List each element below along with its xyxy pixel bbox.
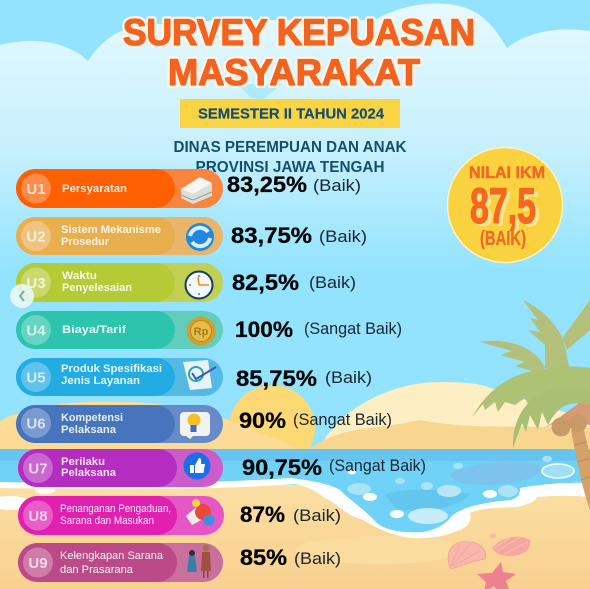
row U5: Produk Spesifikasi Jenis Layanan: Jenis Layanan: [61, 375, 140, 387]
row U3: Waktu Penyelesaian: [16, 263, 356, 302]
row U9: Kelengkapan Sarana: (Baik): [294, 550, 341, 568]
row U2: Sistem Mekanisme Prosedur: Sistem Mekanisme: [61, 224, 161, 236]
row U9: Kelengkapan Sarana: dan Prasarana: [60, 564, 134, 576]
background: sand patch lower: [295, 536, 465, 564]
row U1: Persyaratan: [16, 169, 361, 208]
icon: thumbs up: [184, 452, 210, 480]
title: MASYARAKAT: [168, 52, 420, 93]
row U6: Kompetensi Pelaksana: 90%: [239, 408, 286, 433]
background: front dune: [310, 420, 590, 449]
organisation name: [174, 139, 407, 176]
row U5: Produk Spesifikasi Jenis Layanan: 85,75%: [236, 366, 317, 391]
row U6: Kompetensi Pelaksana: [16, 405, 392, 443]
icon: paper stack: [181, 177, 212, 204]
callout: nilai IKM: (BAIK): [480, 228, 526, 250]
organisation name: PROVINSI JAWA TENGAH: [196, 159, 384, 176]
row U1: Persyaratan: Persyaratan: [62, 183, 127, 195]
background: sky gap behind title: [238, 84, 282, 100]
title: SURVEY KEPUASAN: [123, 12, 475, 53]
row U5: Produk Spesifikasi Jenis Layanan: (Baik): [325, 369, 372, 387]
row U7: Perilaku Pelaksana: [18, 449, 426, 487]
background: clouds: [0, 3, 590, 270]
callout: nilai IKM: 87,5: [470, 178, 536, 234]
icon: small shell: [490, 534, 496, 538]
row U4: Biaya/Tarif: Biaya/Tarif: [62, 324, 126, 336]
row U6: Kompetensi Pelaksana: Kompetensi: [61, 412, 123, 424]
row U4: Biaya/Tarif: (Sangat Baik): [304, 320, 402, 338]
background: beach: [0, 485, 590, 589]
row U8: Penanganan Pengaduan: Penanganan Pengaduan,: [60, 503, 171, 515]
row U2: Sistem Mekanisme Prosedur: (Baik): [319, 228, 367, 246]
icon: clock: [186, 272, 212, 298]
icon: seashell left: [448, 542, 486, 569]
row U8: Penanganan Pengaduan: [18, 496, 341, 535]
organisation name: DINAS PEREMPUAN DAN ANAK: [174, 139, 407, 156]
row U1: Persyaratan: U1: [26, 181, 46, 198]
row U3: Waktu Penyelesaian: Penyelesaian: [62, 282, 132, 294]
icon: idea bulb: [180, 412, 210, 439]
icon: rupiah coin: [186, 316, 216, 346]
row U3: Waktu Penyelesaian: U3: [26, 275, 46, 292]
row U2: Sistem Mekanisme Prosedur: Prosedur: [61, 236, 110, 248]
background: back dunes: [320, 382, 590, 449]
carousel previous button: [10, 284, 34, 308]
title: MASYARAKAT: [168, 52, 420, 93]
row U2: Sistem Mekanisme Prosedur: 83,75%: [231, 223, 312, 248]
row U3: Waktu Penyelesaian: Waktu: [62, 270, 97, 282]
row U7: Perilaku Pelaksana: Perilaku: [61, 456, 105, 468]
row U5: Produk Spesifikasi Jenis Layanan: U5: [26, 370, 46, 386]
row U9: Kelengkapan Sarana: 85%: [240, 545, 287, 570]
title: [123, 12, 475, 93]
background: sun: [229, 385, 315, 471]
row U2: Sistem Mekanisme Prosedur: U2: [26, 228, 46, 246]
callout: nilai IKM: 87,5: [474, 181, 540, 237]
icon: megaphone: [186, 499, 214, 526]
row U3: Waktu Penyelesaian: 82,5%: [232, 270, 299, 295]
row U4: Biaya/Tarif: 100%: [235, 317, 293, 342]
row U7: Perilaku Pelaksana: U7: [28, 460, 48, 478]
row U8: Penanganan Pengaduan: U8: [28, 508, 48, 525]
row U8: Penanganan Pengaduan: (Baik): [293, 507, 341, 525]
row U5: Produk Spesifikasi Jenis Layanan: Produk Spesifikasi: [61, 363, 162, 375]
row U1: Persyaratan: 83,25%: [227, 172, 307, 197]
row U4: Biaya/Tarif: U4: [26, 322, 46, 340]
icon: rupiah coin: Rp: [194, 326, 209, 338]
semester banner: [180, 99, 400, 128]
row U2: Sistem Mekanisme Prosedur: [16, 217, 367, 255]
row U3: Waktu Penyelesaian: (Baik): [309, 274, 356, 292]
row U9: Kelengkapan Sarana: Kelengkapan Sarana: [60, 550, 164, 562]
row U6: Kompetensi Pelaksana: (Sangat Baik): [293, 411, 392, 429]
row U7: Perilaku Pelaksana: 90,75%: [242, 455, 322, 480]
row U7: Perilaku Pelaksana: Pelaksana: [61, 467, 117, 479]
title: SURVEY KEPUASAN: [123, 12, 475, 53]
icon: checklist document: [183, 360, 216, 390]
row U6: Kompetensi Pelaksana: Pelaksana: [61, 424, 117, 436]
row U8: Penanganan Pengaduan: 87%: [240, 502, 285, 527]
row U9: Kelengkapan Sarana: U9: [28, 555, 48, 572]
icon: refresh: [186, 223, 214, 251]
row U1: Persyaratan: (Baik): [313, 177, 361, 195]
row U7: Perilaku Pelaksana: (Sangat Baik): [329, 457, 426, 475]
icon: palm tree: [472, 300, 590, 510]
callout: nilai IKM: NILAI IKM: [469, 164, 545, 182]
row U5: Produk Spesifikasi Jenis Layanan: [16, 358, 372, 396]
background: sea: [0, 449, 590, 538]
row U6: Kompetensi Pelaksana: U6: [26, 416, 46, 432]
row U9: Kelengkapan Sarana: [18, 543, 341, 582]
icon: family: [187, 544, 211, 578]
row U4: Biaya/Tarif: [16, 311, 402, 349]
icon: seashell right: [492, 537, 530, 556]
semester banner: SEMESTER II TAHUN 2024: [198, 106, 384, 122]
icon: starfish: [477, 562, 516, 589]
row U8: Penanganan Pengaduan: Sarana dan Masukan: [60, 515, 154, 527]
callout: nilai IKM: [448, 148, 562, 262]
background: sand ridge: [0, 402, 300, 449]
